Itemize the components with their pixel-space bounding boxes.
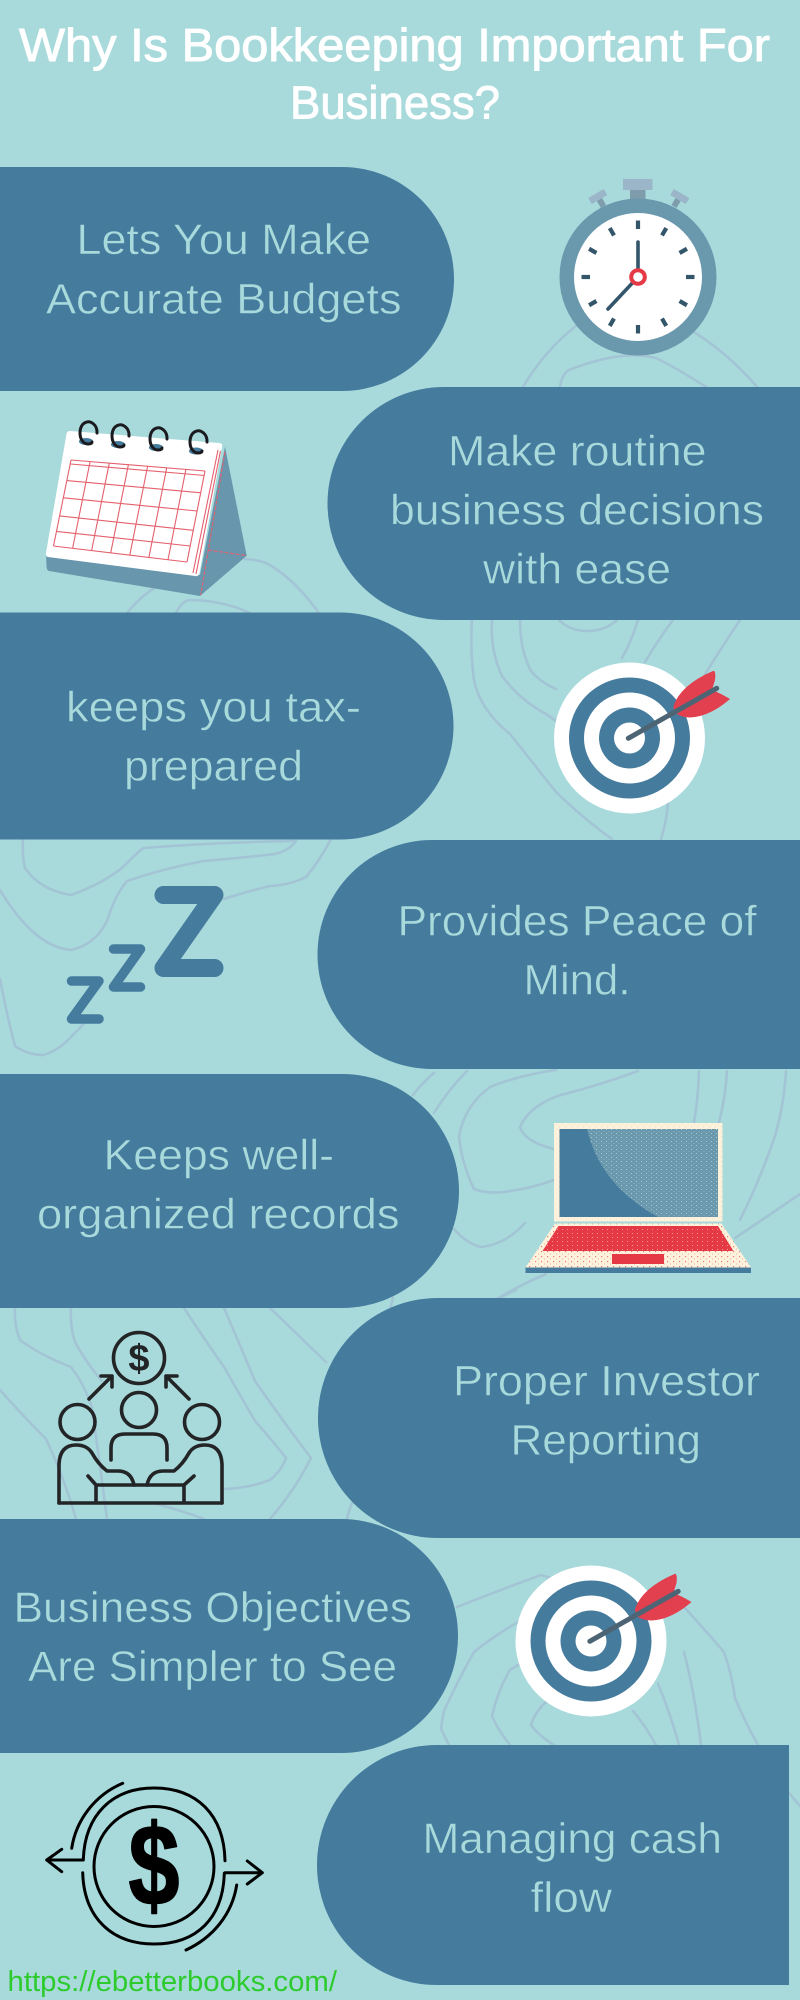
panel: Make routine business decisions with ease bbox=[328, 387, 800, 620]
panel: keeps you tax-prepared bbox=[0, 612, 453, 840]
panel: Keeps well-organized records: Keeps well- bbox=[104, 1132, 334, 1180]
panel: Provides Peace of Mind. bbox=[318, 840, 800, 1069]
icon: desk calendar bbox=[46, 422, 247, 596]
panel: keeps you tax-prepared: keeps you tax- bbox=[66, 684, 361, 732]
panel: Keeps well-organized records bbox=[0, 1074, 459, 1308]
website url: https://ebetterbooks.com/ bbox=[8, 1966, 338, 1998]
icon: investor meeting: $ bbox=[128, 1338, 150, 1380]
icon: cash flow dollar: $ bbox=[128, 1802, 180, 1930]
panel: Lets You Make Accurate Budgets bbox=[0, 167, 454, 391]
icon: sleeping zzz bbox=[72, 895, 214, 1019]
panel: Proper Investor Reporting bbox=[318, 1298, 800, 1538]
icon: target with dart bbox=[554, 662, 730, 814]
panel: Lets You Make Accurate Budgets: Accurate Budgets bbox=[46, 276, 402, 324]
panel: Managing cash flow bbox=[317, 1745, 789, 1985]
panel: Lets You Make Accurate Budgets: Lets You Make bbox=[76, 216, 371, 264]
panel: Proper Investor Reporting: Proper Investor bbox=[453, 1358, 760, 1406]
panel: Managing cash flow: flow bbox=[530, 1874, 613, 1922]
panel: Business Objectives Are Simpler to See bbox=[0, 1519, 458, 1753]
panel: Make routine business decisions with ease: business decisions bbox=[390, 486, 764, 534]
icon: cash flow dollar bbox=[47, 1783, 262, 1950]
panel: Proper Investor Reporting: Reporting bbox=[510, 1416, 701, 1464]
icon: stopwatch bbox=[560, 179, 716, 356]
title: Why Is Bookkeeping Important For bbox=[19, 19, 770, 71]
panel: keeps you tax-prepared: prepared bbox=[124, 742, 303, 790]
panel: Make routine business decisions with ease: with ease bbox=[482, 546, 671, 594]
panel: Make routine business decisions with ease: Make routine bbox=[448, 428, 706, 476]
panel: Business Objectives Are Simpler to See: Business Objectives bbox=[14, 1584, 412, 1632]
panel: Provides Peace of Mind.: Mind. bbox=[524, 956, 630, 1004]
panel: Keeps well-organized records: organized records bbox=[37, 1190, 400, 1238]
title bbox=[19, 19, 770, 128]
panel: Provides Peace of Mind.: Provides Peace of bbox=[398, 898, 758, 946]
icon: investor meeting bbox=[59, 1332, 222, 1503]
panel: Managing cash flow: Managing cash bbox=[422, 1815, 722, 1863]
icon: laptop bbox=[526, 1123, 751, 1273]
panel: Business Objectives Are Simpler to See: Are Simpler to See bbox=[28, 1643, 397, 1691]
icon: target with dart 2 bbox=[516, 1566, 692, 1716]
title: Business? bbox=[290, 76, 500, 128]
